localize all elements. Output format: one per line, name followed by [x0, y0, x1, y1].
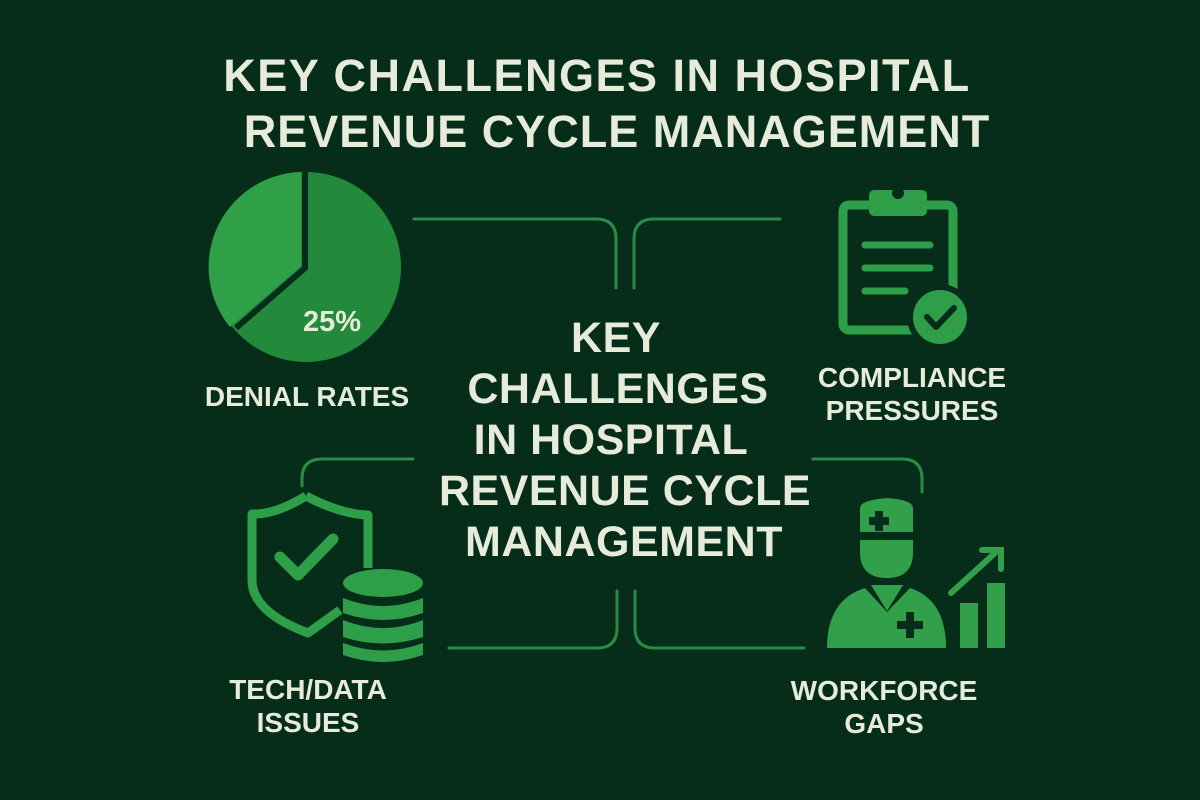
- icon: health worker with chart: [827, 498, 1005, 648]
- label: compliance pressures: COMPLIANCE: [818, 362, 1006, 393]
- icon: pie chart: 25%: [303, 306, 361, 338]
- label: workforce gaps: [791, 675, 977, 739]
- label: tech/data issues: ISSUES: [257, 707, 359, 738]
- label: workforce gaps: GAPS: [844, 708, 924, 739]
- label: workforce gaps: WORKFORCE: [791, 675, 977, 706]
- center heading: KEY: [571, 314, 661, 362]
- label: compliance pressures: PRESSURES: [826, 395, 998, 426]
- connector lines: [302, 219, 922, 648]
- title: REVENUE CYCLE MANAGEMENT: [244, 106, 990, 157]
- label: tech/data issues: TECH/DATA: [229, 674, 387, 705]
- title: KEY CHALLENGES IN HOSPITAL: [223, 50, 971, 101]
- icon: pie chart: [209, 172, 401, 362]
- center heading: [439, 314, 811, 566]
- center heading: CHALLENGES: [467, 365, 769, 413]
- label: tech/data issues: [229, 674, 387, 738]
- center heading: MANAGEMENT: [465, 518, 783, 566]
- center heading: REVENUE CYCLE: [439, 467, 811, 515]
- label: denial rates: DENIAL RATES: [205, 381, 409, 412]
- title: [223, 50, 990, 157]
- icon: shield and database: [252, 496, 423, 662]
- center heading: IN HOSPITAL: [474, 416, 748, 464]
- label: compliance pressures: [818, 362, 1006, 426]
- icon: clipboard: [843, 187, 973, 350]
